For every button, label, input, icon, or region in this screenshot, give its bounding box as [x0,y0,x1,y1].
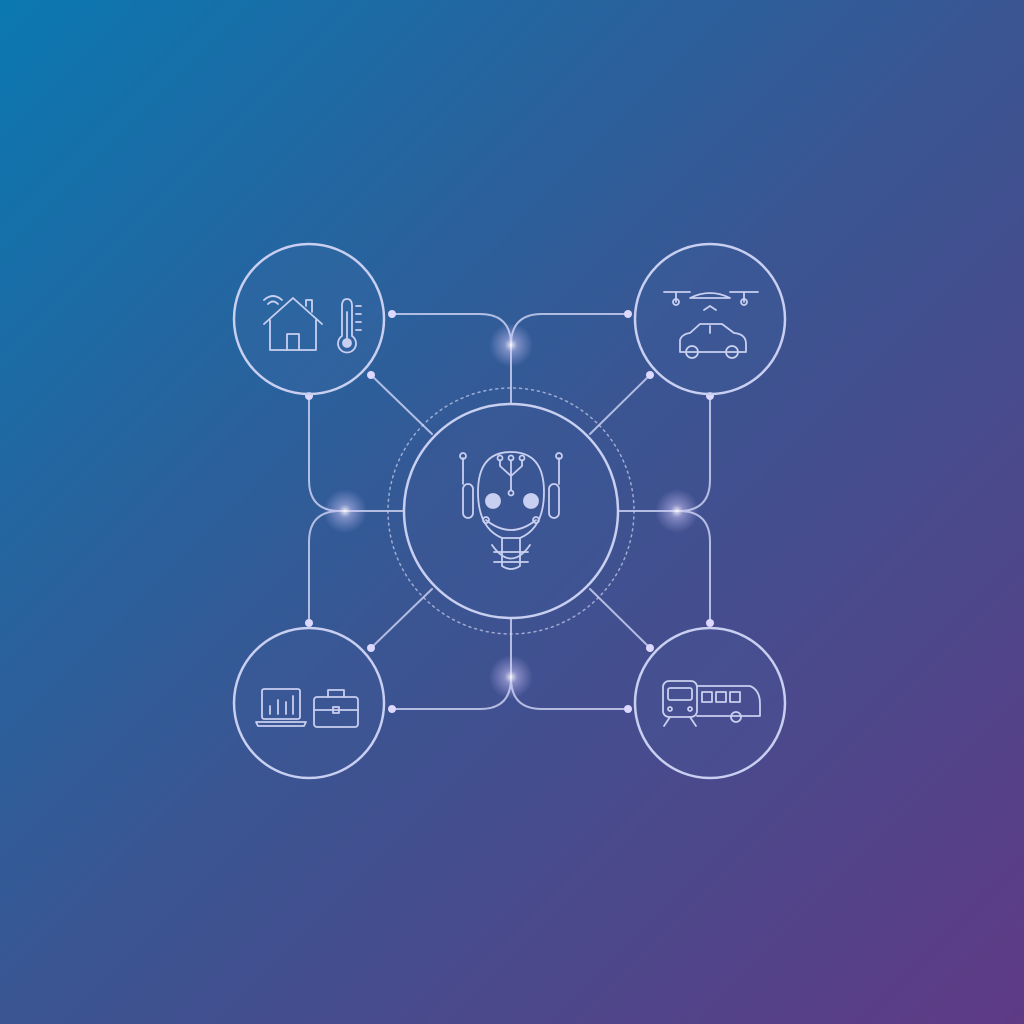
icon: house [264,296,322,350]
icon: thermometer [338,299,361,352]
connector lines [309,314,710,709]
panel: transit [635,628,785,778]
center hub circle [388,388,634,634]
icon: robot head [460,452,562,569]
glow points [305,310,714,713]
panel: smart home [234,244,384,394]
panel: work [234,628,384,778]
panel: drone and car [635,244,785,394]
